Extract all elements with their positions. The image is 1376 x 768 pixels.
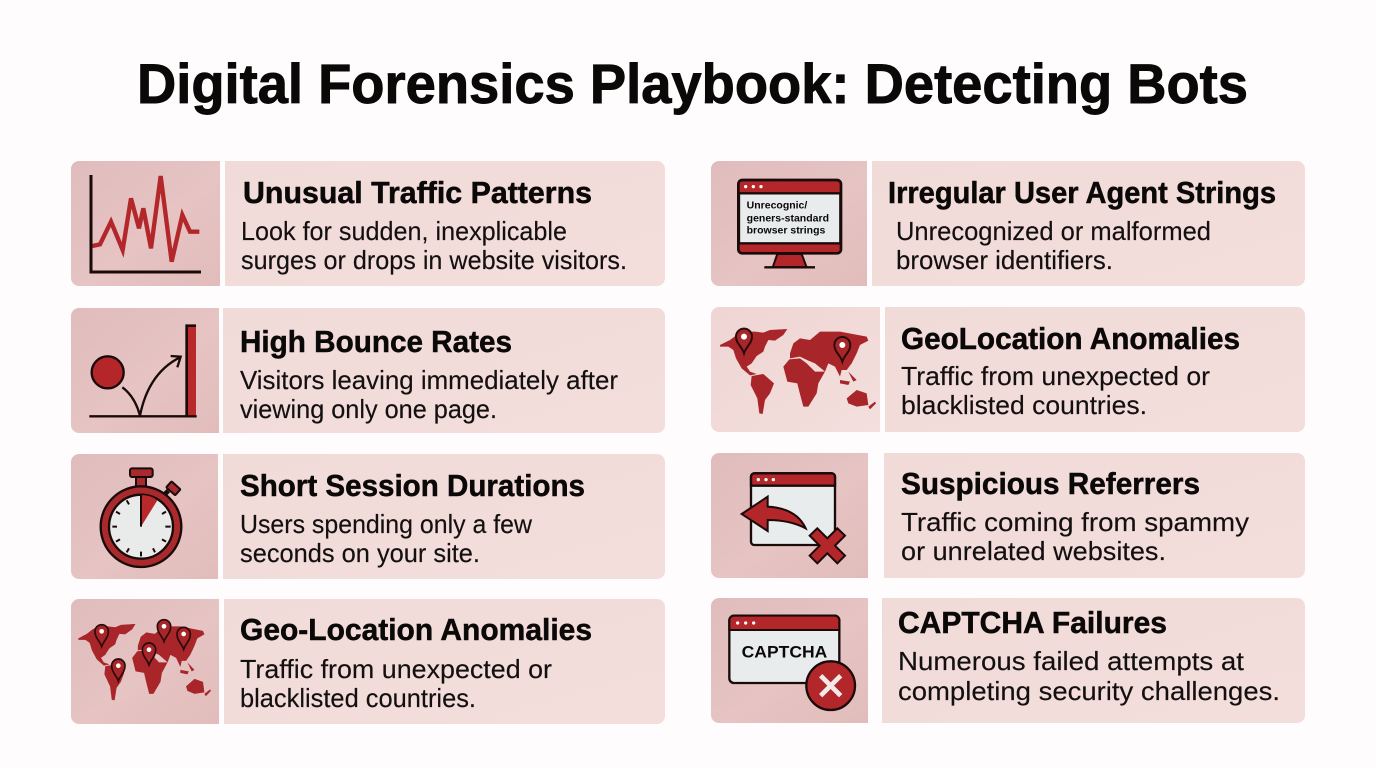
panel: irregular user agent strings xyxy=(711,161,1305,286)
description: Traffic coming from spammy xyxy=(901,507,1249,537)
text tile background xyxy=(882,598,1305,723)
panel: unusual traffic patterns xyxy=(71,161,665,286)
icon tile: captcha window with error badge xyxy=(711,598,868,723)
heading: High Bounce Rates xyxy=(240,324,512,359)
icon tile: monitor: Unrecognic/ xyxy=(747,201,808,212)
heading: Unusual Traffic Patterns xyxy=(243,175,592,210)
heading: CAPTCHA Failures xyxy=(898,605,1167,640)
panel: high bounce rates xyxy=(71,308,665,433)
icon tile: monitor: geners-standard xyxy=(747,213,829,224)
panel: short session durations xyxy=(71,454,665,579)
title: Digital Forensics Playbook: Detecting Bots xyxy=(137,52,1248,115)
description: completing security challenges. xyxy=(898,676,1280,706)
text tile background xyxy=(223,308,665,433)
icon tile: stopwatch xyxy=(71,454,218,579)
heading: Short Session Durations xyxy=(240,468,585,503)
icon tile: browser with back arrow and cross xyxy=(711,453,868,578)
description: seconds on your site. xyxy=(240,538,480,568)
text tile background xyxy=(884,453,1305,578)
panel: suspicious referrers xyxy=(711,453,1305,578)
description: or unrelated websites. xyxy=(901,536,1166,566)
icon tile: world map with five pins xyxy=(71,599,219,724)
icon tile: captcha window with error badge: CAPTCHA xyxy=(742,643,827,662)
panel: captcha failures xyxy=(711,598,1305,723)
description: Traffic from unexpected or xyxy=(901,361,1210,391)
description: browser identifiers. xyxy=(896,245,1113,275)
heading: Geo-Location Anomalies xyxy=(240,612,592,647)
icon tile: world map with two pins xyxy=(711,307,880,432)
panel: geo-location anomalies xyxy=(71,599,665,724)
icon tile: monitor xyxy=(711,161,867,286)
text tile background xyxy=(872,161,1305,286)
description: Unrecognized or malformed xyxy=(896,216,1211,246)
description: blacklisted countries. xyxy=(240,683,476,713)
description: surges or drops in website visitors. xyxy=(241,245,627,275)
heading: GeoLocation Anomalies xyxy=(901,321,1240,356)
text tile background xyxy=(885,307,1305,432)
description: Traffic from unexpected or xyxy=(240,654,552,684)
heading: Irregular User Agent Strings xyxy=(888,175,1276,210)
description: Visitors leaving immediately after xyxy=(240,365,618,395)
icon tile: monitor: browser strings xyxy=(747,226,826,237)
heading: Suspicious Referrers xyxy=(901,466,1200,501)
icon tile: bouncing ball xyxy=(71,308,219,433)
text tile background xyxy=(223,454,665,579)
panel: geolocation anomalies xyxy=(711,307,1305,432)
description: Numerous failed attempts at xyxy=(898,646,1245,676)
description: viewing only one page. xyxy=(240,394,497,424)
description: Users spending only a few xyxy=(240,509,532,539)
icon tile: traffic chart xyxy=(71,161,220,286)
text tile background xyxy=(225,161,665,286)
text tile background xyxy=(224,599,665,724)
description: Look for sudden, inexplicable xyxy=(241,216,567,246)
description: blacklisted countries. xyxy=(901,390,1147,420)
